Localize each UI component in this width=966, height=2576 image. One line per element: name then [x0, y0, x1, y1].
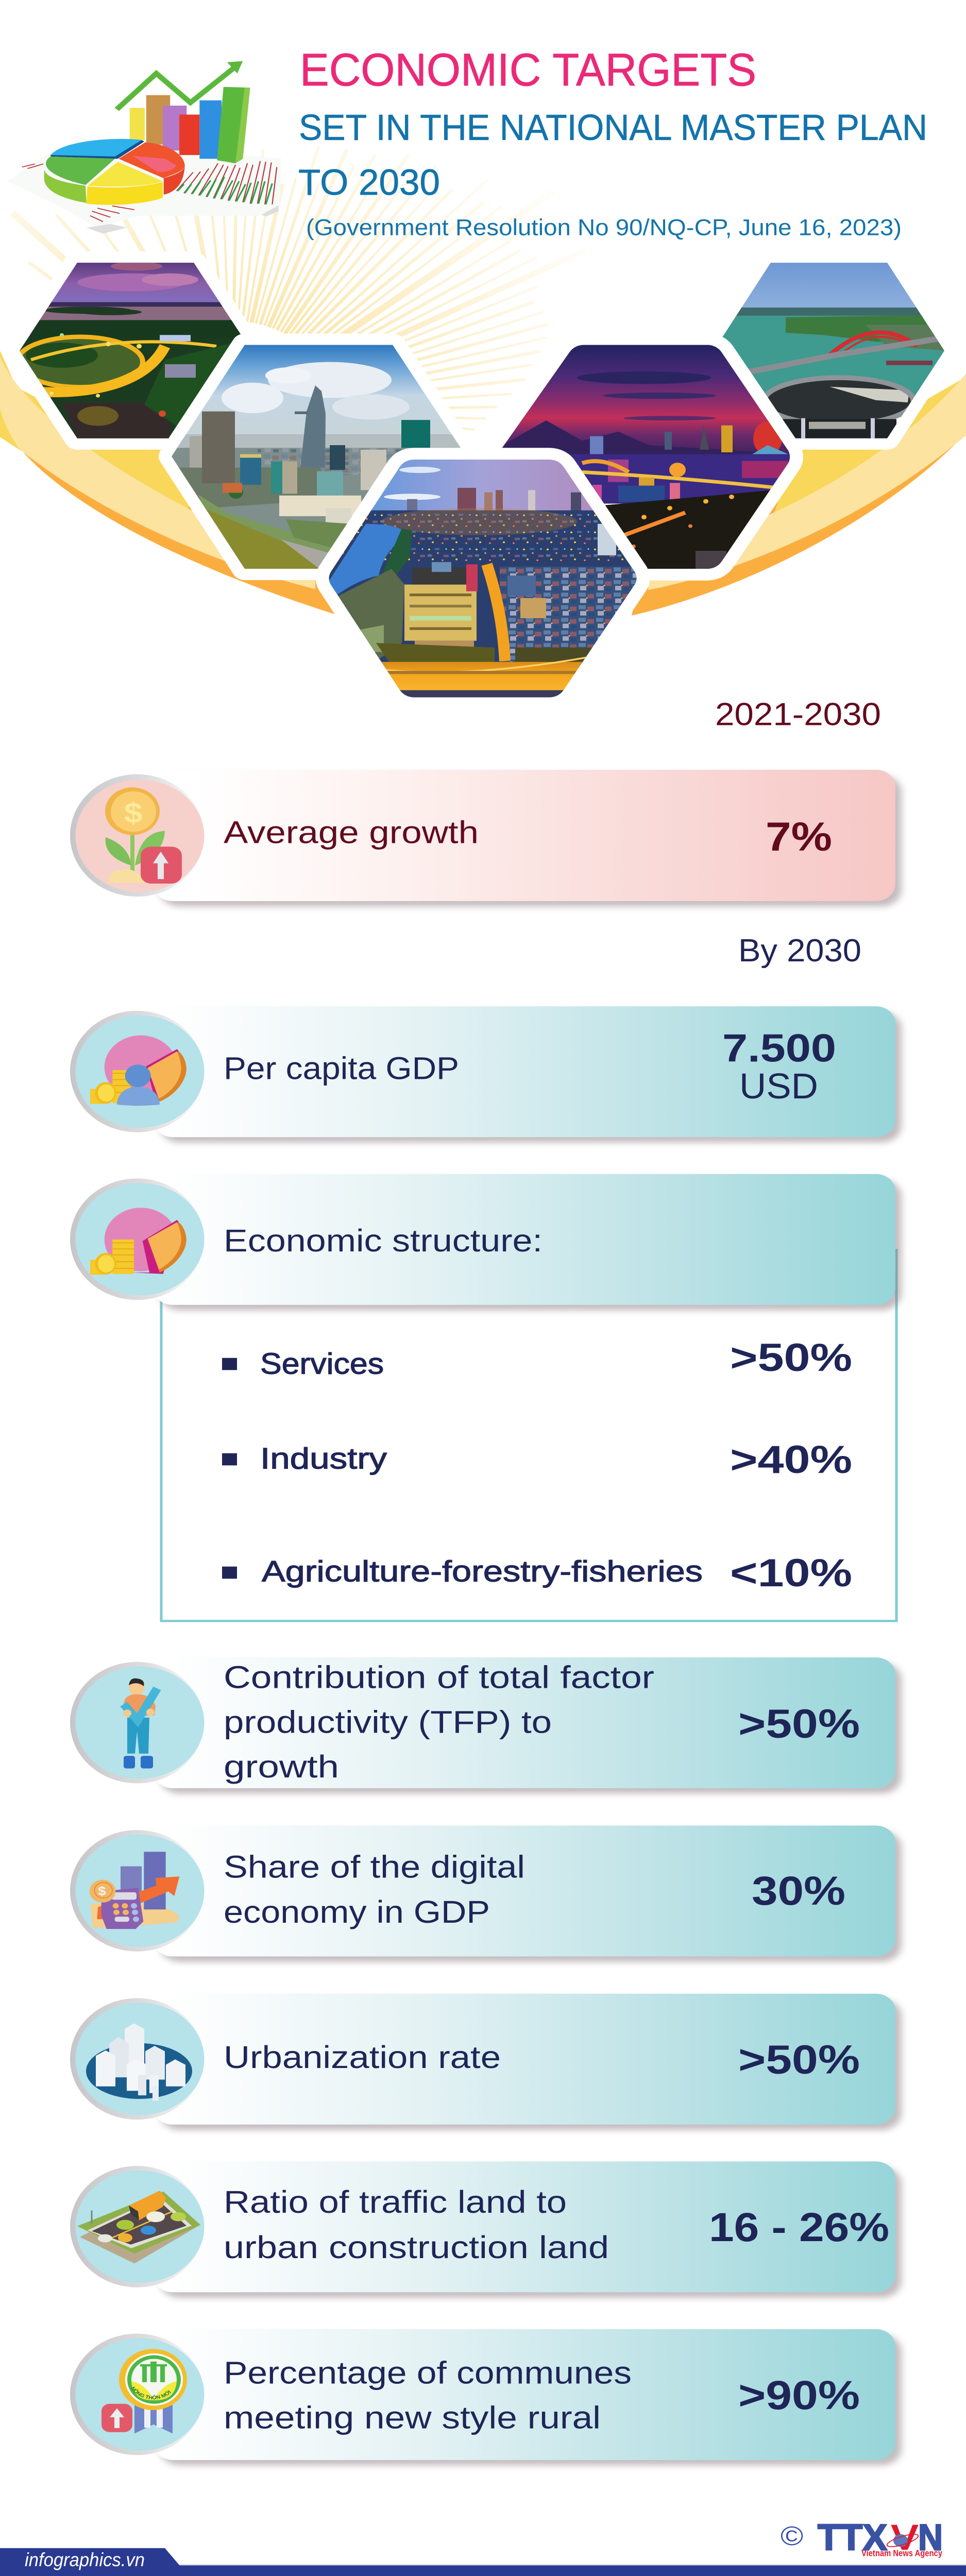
value 7.500 USD	[722, 1027, 836, 1106]
value: >50%	[738, 2037, 860, 2082]
value 7%: 7%	[766, 815, 832, 859]
label: Percentage of communes	[224, 2355, 632, 2390]
value 7.500 USD: 7.500	[722, 1027, 836, 1070]
label	[224, 1659, 654, 1784]
photo: hexagon harbour bridge	[711, 263, 948, 442]
card: urbanization rate	[70, 1994, 902, 2130]
label: Contribution of total factor	[224, 1659, 654, 1694]
icon: white city on blue disc	[86, 2023, 192, 2101]
row: services: >50%	[730, 1336, 852, 1380]
wordmark: V	[890, 2517, 919, 2558]
label: meeting new style rural	[224, 2400, 601, 2435]
row: industry: Industry	[260, 1442, 387, 1475]
period label by 2030: By 2030	[738, 933, 861, 969]
card: average growth	[70, 770, 902, 906]
icon: new rural medal with arrow: NÔNG THÔN MỚI	[131, 2386, 171, 2400]
label: growth	[224, 1749, 339, 1784]
icon: pie chart, coins and person	[90, 1036, 187, 1106]
label: urban construction land	[224, 2230, 609, 2265]
card: traffic land ratio	[70, 2161, 902, 2298]
icon: calculator, bars and arrow: $	[98, 1884, 106, 1898]
wordmark	[818, 2517, 943, 2558]
icon: person with check mark	[123, 1679, 157, 1769]
icon: new rural medal with arrow	[101, 2349, 187, 2434]
label: Share of the digital	[224, 1850, 525, 1885]
row: services	[222, 1336, 852, 1380]
row: industry: >40%	[730, 1438, 852, 1482]
card: new style rural communes	[70, 2329, 906, 2469]
icon: calculator, bars and arrow	[90, 1852, 179, 1929]
label	[224, 1850, 525, 1929]
period label 2021-2030: 2021-2030	[715, 697, 881, 733]
card: total factor productivity	[70, 1657, 902, 1793]
photo: hexagon skyline with tower	[170, 345, 469, 569]
value: 30%	[752, 1868, 845, 1913]
card: digital economy	[70, 1825, 902, 1962]
icon: coin plant with up arrow: $	[124, 797, 143, 829]
card: per capita GDP	[70, 1006, 902, 1143]
label: Average growth	[224, 815, 479, 850]
wordmark: N	[918, 2517, 943, 2558]
value: 16 - 26%	[709, 2205, 889, 2250]
label	[224, 2184, 609, 2265]
row: agriculture: <10%	[730, 1551, 852, 1595]
source line: (Government Resolution No 90/NQ-CP, June 16, 2023)	[306, 215, 902, 241]
icon: coin plant with up arrow	[105, 787, 182, 884]
website label: infographics.vn	[25, 2549, 145, 2570]
copyright mark: ©	[781, 2520, 803, 2551]
icon: pie chart and coins	[90, 1208, 187, 1275]
title block	[298, 44, 927, 241]
row: services: Services	[260, 1347, 384, 1380]
panel: economic structure	[70, 1174, 902, 1621]
photo: hexagon central city panorama	[325, 459, 639, 699]
photo: hexagon river city at dusk	[495, 345, 793, 569]
card: economic structure header	[70, 1174, 902, 1310]
label: productivity (TFP) to	[224, 1705, 552, 1740]
value: >50%	[738, 1701, 860, 1746]
panel outline	[161, 1250, 896, 1621]
logo: TTXVN Vietnam News Agency	[781, 2517, 943, 2558]
label: Urbanization rate	[224, 2040, 501, 2075]
photo: hexagon city night 1	[15, 262, 258, 442]
wordmark: TTX	[818, 2517, 887, 2558]
row: agriculture: Agriculture-forestry-fisheries	[262, 1555, 703, 1588]
label: Per capita GDP	[224, 1051, 459, 1086]
label: economy in GDP	[224, 1894, 490, 1929]
subheading line 2: TO 2030	[298, 162, 440, 203]
row: industry	[222, 1438, 852, 1482]
main heading: ECONOMIC TARGETS	[300, 44, 756, 95]
label	[224, 2355, 632, 2435]
row: agriculture	[222, 1551, 852, 1595]
label: Ratio of traffic land to	[224, 2184, 567, 2219]
footer bar	[0, 2548, 966, 2576]
background sun rays	[12, 146, 586, 430]
value 7.500 USD: USD	[739, 1066, 818, 1106]
icon: header chart with pie, bars and arrow	[7, 61, 281, 233]
decorative golden swoosh	[0, 351, 966, 616]
value: >90%	[738, 2373, 860, 2418]
label: Economic structure:	[224, 1223, 543, 1258]
icon: road with cars and bus	[77, 2191, 200, 2263]
